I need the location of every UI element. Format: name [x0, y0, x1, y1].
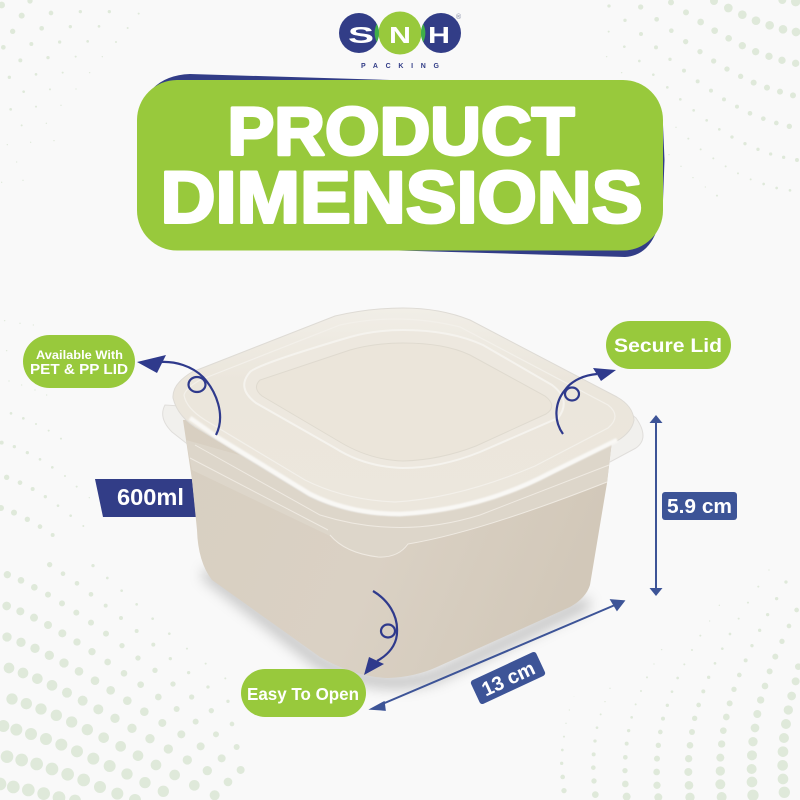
callout: Available With PET & PP LID: PET & PP LID — [30, 361, 128, 378]
title text — [160, 94, 642, 238]
label: capacity 600ml: 600ml — [117, 484, 184, 510]
label: capacity 600ml — [95, 479, 196, 517]
title banner — [137, 74, 664, 257]
callout: Easy To Open — [241, 669, 366, 717]
callout: Secure Lid: Secure Lid — [614, 335, 722, 357]
title text: DIMENSIONS — [160, 158, 642, 238]
dimension label: 13 cm: 13 cm — [479, 658, 539, 701]
dimension label: 13 cm — [470, 651, 546, 705]
logo: SNH Packing: H — [428, 22, 450, 48]
arrow: lid callout pointer — [137, 355, 220, 435]
arrow: secure lid pointer — [556, 368, 616, 434]
logo: SNH Packing: S — [348, 22, 374, 48]
logo: SNH Packing: N — [389, 22, 411, 48]
product: kraft container with clear lid — [163, 308, 643, 682]
callout: Available With PET & PP LID — [23, 335, 135, 388]
callout: Easy To Open: Easy To Open — [247, 684, 359, 704]
logo: SNH Packing: ® — [456, 13, 462, 21]
callout: Secure Lid — [606, 321, 731, 369]
arrow: easy to open pointer — [364, 591, 397, 675]
callout: Available With PET & PP LID: Available With — [36, 350, 123, 362]
dimension: width arrow — [371, 600, 624, 710]
dimension label: 5.9 cm — [662, 492, 737, 520]
dimension: height arrow — [650, 415, 662, 596]
logo: SNH Packing — [339, 12, 462, 70]
logo: SNH Packing: PACKING — [361, 63, 440, 70]
title text: PRODUCT — [228, 94, 574, 170]
dimension label: 5.9 cm: 5.9 cm — [667, 496, 732, 518]
